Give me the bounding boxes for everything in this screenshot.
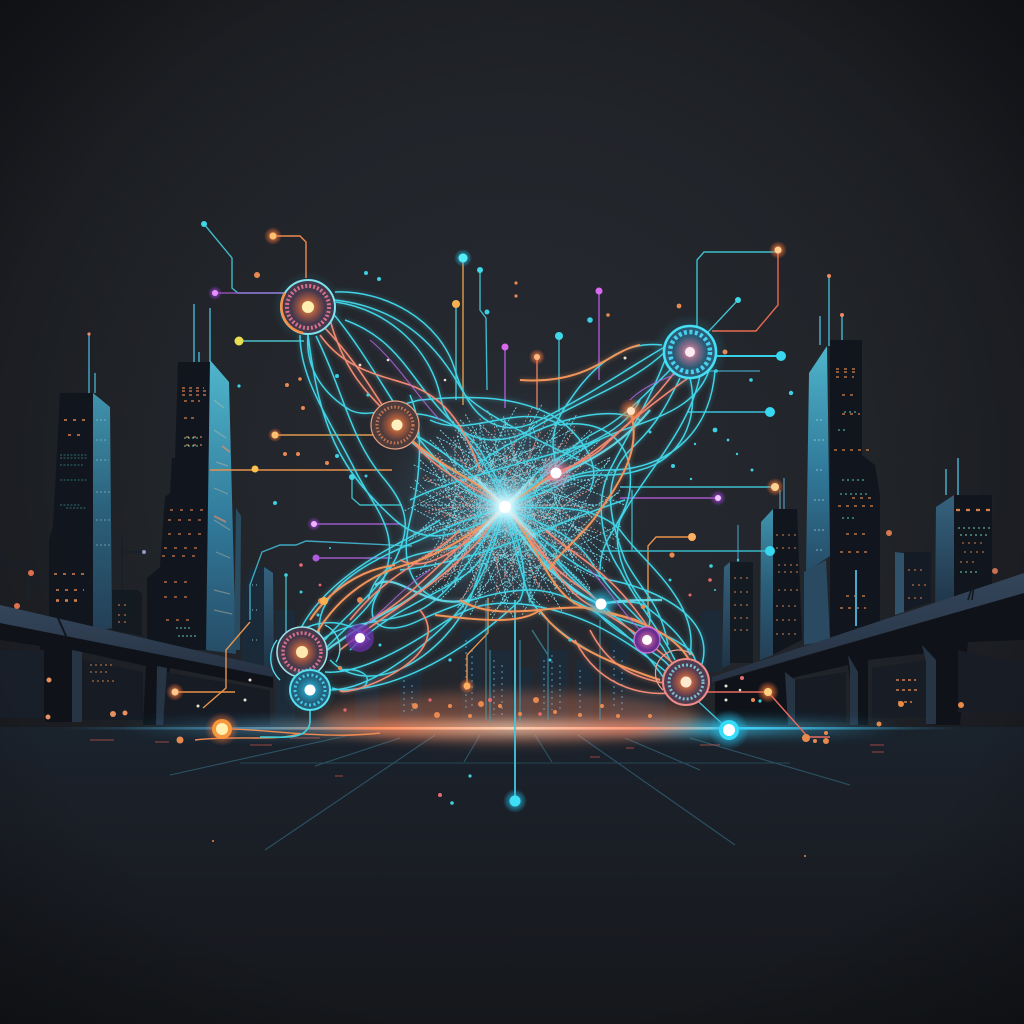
building: small left block bbox=[112, 590, 142, 636]
bright cyan strands bbox=[320, 410, 662, 655]
glow node: inner orange bbox=[618, 398, 644, 424]
building: tall left tower bbox=[147, 304, 241, 654]
peripheral terminal dots bbox=[166, 221, 787, 813]
hub node: upper right bbox=[652, 314, 728, 390]
orange terminals bbox=[166, 227, 787, 703]
pink strands bbox=[320, 320, 700, 693]
street lights and ground dashes bbox=[14, 530, 998, 776]
horizon light beam bbox=[60, 692, 960, 744]
large ground node: cyan bbox=[709, 710, 749, 750]
central star bbox=[471, 473, 539, 541]
skyline: left towers bbox=[0, 304, 286, 668]
large ground node: orange bbox=[205, 712, 239, 746]
building: mid right block bbox=[895, 552, 931, 615]
small scattered particles bbox=[176, 271, 829, 857]
hub node: lower right bbox=[655, 650, 709, 705]
right elevated highway bbox=[712, 573, 1024, 725]
hub node: purple left bbox=[346, 624, 374, 652]
building: slim left tower bbox=[242, 567, 286, 668]
ground perspective grid bbox=[170, 735, 850, 850]
neural network strand glow bbox=[290, 292, 715, 695]
cyan terminals bbox=[201, 221, 786, 813]
hub node: lower left bbox=[271, 625, 340, 680]
circuit traces with terminals bbox=[175, 224, 830, 800]
hub node: lower left cyan bbox=[283, 663, 337, 717]
hub node: left inner bbox=[371, 401, 419, 449]
building: small right tower bbox=[698, 610, 722, 672]
hub node: upper left bbox=[272, 271, 344, 343]
skyline: right towers bbox=[698, 274, 992, 672]
glow node: inner pink bbox=[539, 456, 573, 490]
neural network strands bbox=[290, 292, 715, 695]
central mesh glow bbox=[370, 382, 640, 632]
ground plane bbox=[0, 727, 1024, 1024]
orange strands bbox=[308, 345, 695, 690]
neural network fine mesh bbox=[383, 385, 647, 644]
building: main right tower bbox=[804, 274, 880, 645]
glow node: inner cyan bbox=[584, 587, 618, 621]
violet strands bbox=[360, 340, 695, 630]
purple terminals bbox=[208, 286, 726, 562]
left elevated highway bbox=[0, 605, 273, 725]
building: right mid tower bbox=[760, 478, 802, 660]
building: far right tower bbox=[935, 458, 992, 612]
cyan strands bbox=[290, 292, 715, 695]
yellow terminal bbox=[234, 336, 244, 346]
building: right lower tower bbox=[722, 525, 753, 668]
skyline: far center buildings bbox=[275, 610, 665, 726]
building: left tower bbox=[49, 332, 112, 632]
hub node: purple right bbox=[634, 627, 660, 653]
